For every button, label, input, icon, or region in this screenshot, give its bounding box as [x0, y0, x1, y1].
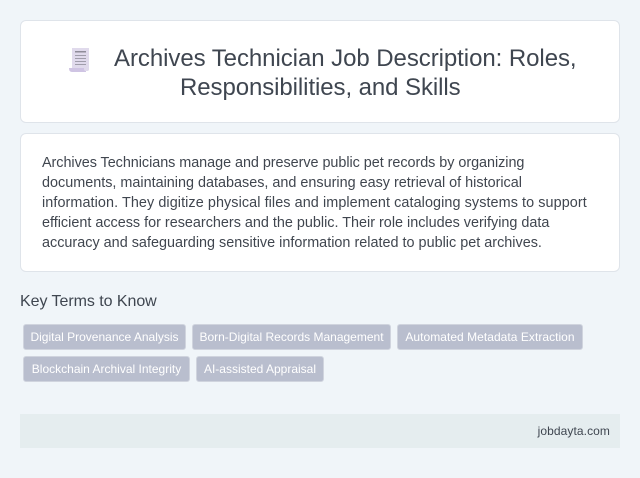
description text: documents, maintaining databases, and ensuring easy retrieval of historical	[42, 175, 522, 191]
description text: information. They digitize physical files and implement cataloging systems to support	[42, 195, 587, 211]
heading: key terms: Key Terms to Know	[20, 293, 157, 310]
tag	[192, 324, 391, 350]
tag	[196, 356, 324, 382]
title	[114, 45, 577, 101]
description text: accuracy and safeguarding sensitive information related to public pet archives.	[42, 235, 542, 251]
tag: Blockchain Archival Integrity	[32, 362, 181, 376]
tag list	[23, 324, 583, 382]
tag: Automated Metadata Extraction	[405, 330, 575, 344]
description text	[42, 155, 587, 251]
tag: Digital Provenance Analysis	[30, 330, 179, 344]
tag	[397, 324, 583, 350]
title: Responsibilities, and Skills	[180, 74, 461, 101]
tag: AI-assisted Appraisal	[204, 362, 316, 376]
description text: Archives Technicians manage and preserve public pet records by organizing	[42, 155, 524, 171]
tag	[23, 324, 186, 350]
title: Archives Technician Job Description: Roles,	[114, 45, 577, 72]
tag	[23, 356, 190, 382]
panel: description card	[20, 133, 620, 272]
panel: title card	[20, 20, 620, 123]
description text: efficient access for researchers and the public. Their role includes verifying data	[42, 215, 549, 231]
footer source text: jobdayta.com	[538, 424, 610, 438]
tag: Born-Digital Records Management	[199, 330, 384, 344]
icon: document scroll	[69, 48, 89, 72]
footer bar	[20, 414, 620, 448]
